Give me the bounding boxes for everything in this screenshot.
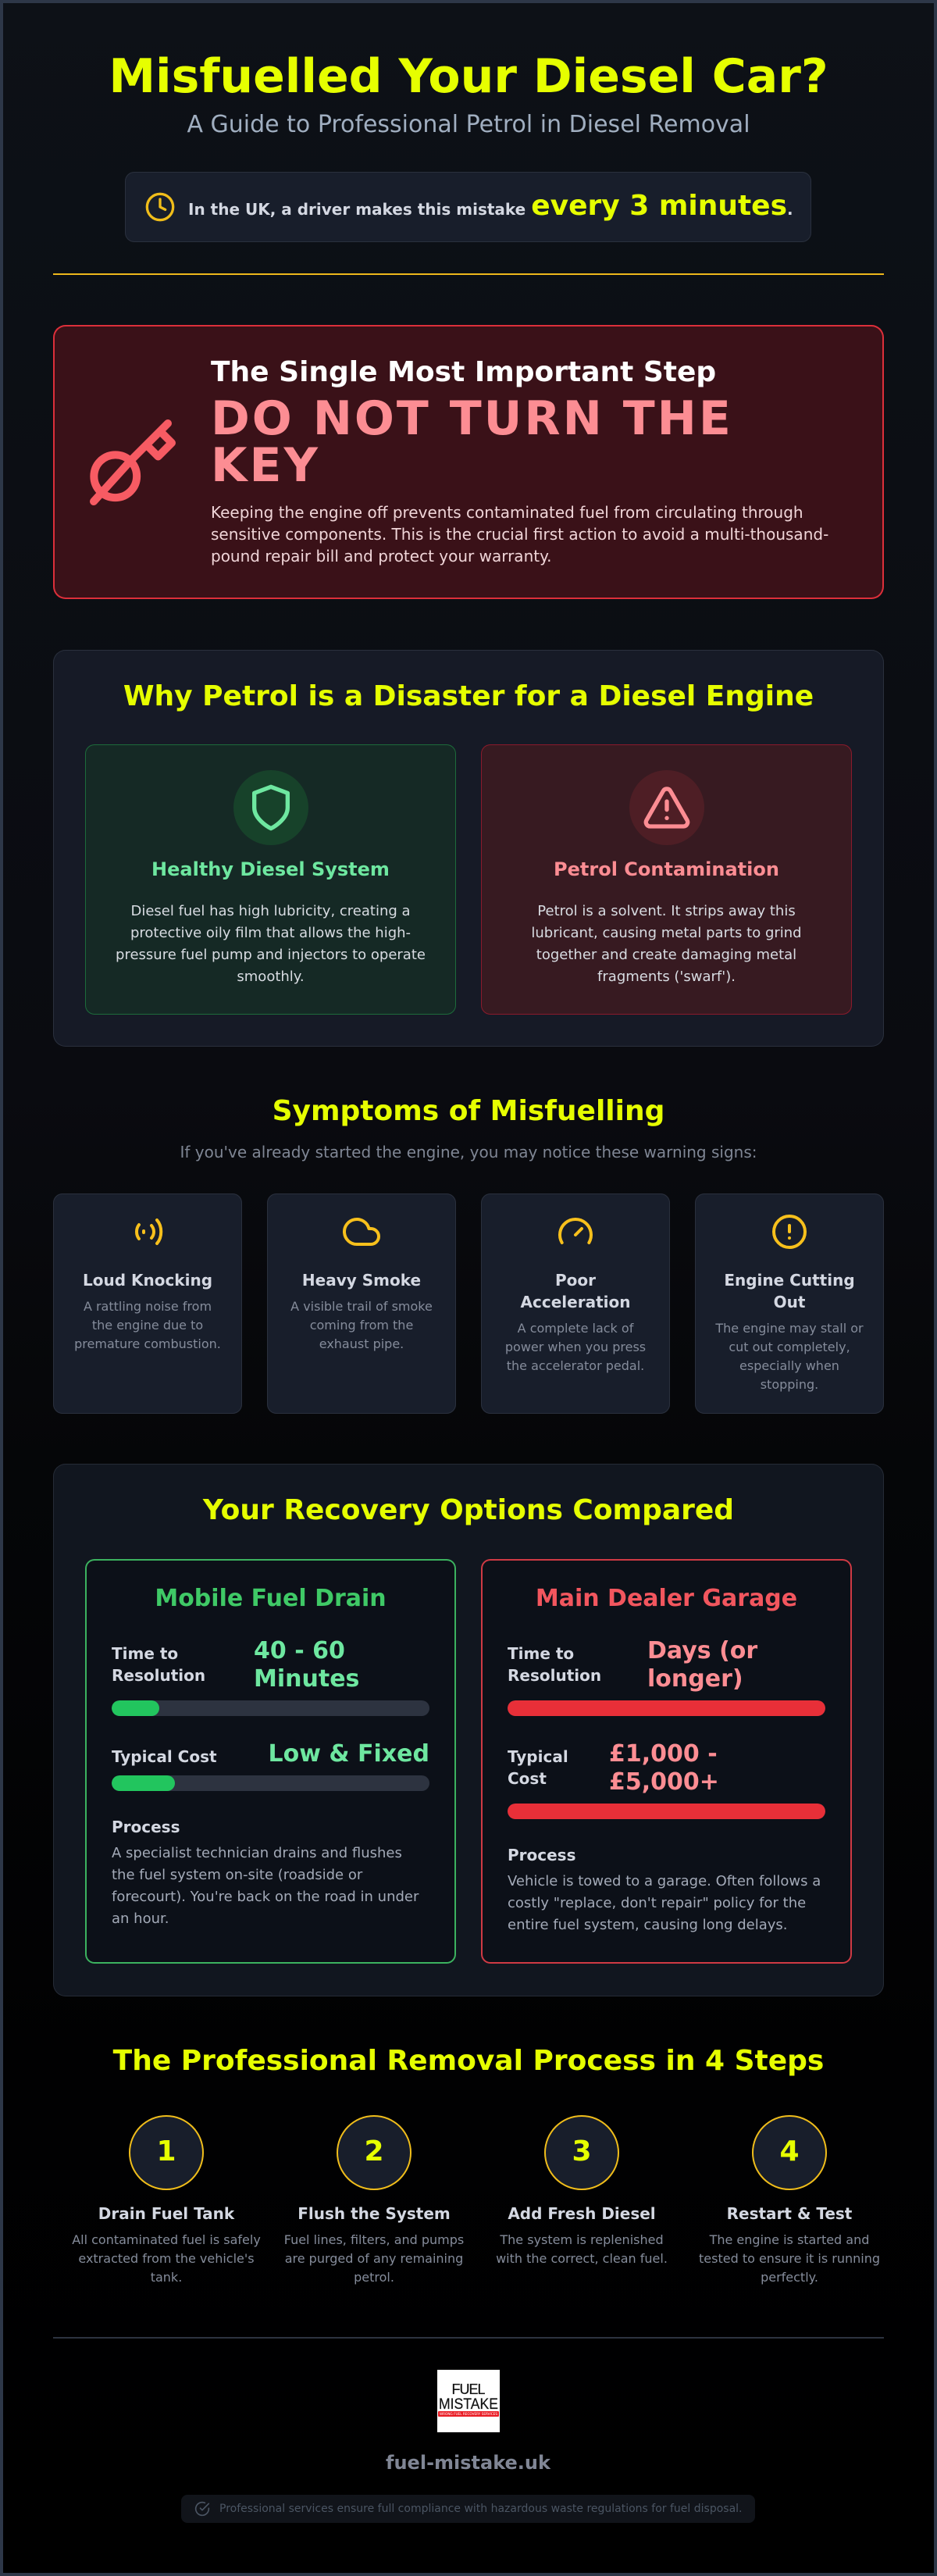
subtitle: A Guide to Professional Petrol in Diesel Removal [187,111,750,138]
alert explanation: sensitive components. This is the crucial first action to avoid a multi-thousand- [211,525,828,544]
title: Misfuelled Your Diesel Car? [109,49,828,104]
panel: why petrol is a disaster [53,650,884,1047]
label: time [112,1644,205,1685]
step 2 [284,2115,464,2285]
icon: check circle [195,2501,209,2517]
card text: together and create damaging metal [536,947,796,963]
label: cost: Typical Cost [112,1747,217,1766]
step number: 1 [156,2135,176,2167]
card text: fragments ('swarf'). [597,969,736,985]
logo: WRONG FUEL RECOVERY SERVICES [440,2412,497,2416]
value: time: longer) [647,1665,743,1693]
icon: gauge [558,1218,593,1245]
process text: Vehicle is towed to a garage. Often follows a [508,1873,821,1889]
label: time: Resolution [112,1666,205,1685]
option title: Main Dealer Garage [536,1585,797,1612]
symptom text: power when you press [505,1340,646,1354]
card text: Petrol is a solvent. It strips away this [537,903,796,919]
label: cost: Cost [508,1769,547,1788]
step text: The engine is started and [710,2232,869,2247]
footer [181,2370,755,2523]
process text [112,1845,419,1927]
symptom text: Out [774,1293,805,1311]
symptom text: Loud Knocking [83,1271,212,1290]
process text: entire fuel system, causing long delays. [508,1917,788,1933]
card title: Petrol Contamination [554,858,779,880]
symptom: loud knocking [53,1193,242,1414]
heading: Why Petrol is a Disaster for a Diesel Engine [123,680,814,712]
note text: Professional services ensure full compliance with hazardous waste regulations for fuel disposal. [219,2503,742,2515]
symptom text: Acceleration [521,1293,630,1311]
card text: pressure fuel pump and injectors to operate [116,947,426,963]
symptom text [715,1271,864,1392]
symptom text: stopping. [761,1377,818,1392]
statistic callout [125,172,811,242]
process text [508,1873,821,1933]
step 3 [496,2115,668,2266]
card text: Diesel fuel has high lubricity, creating a [130,903,411,919]
symptom text: A complete lack of [518,1321,633,1336]
icon: clock [145,192,175,222]
step 4 [699,2115,880,2285]
icon: warning triangle [629,770,704,845]
process text: costly "replace, don't repair" policy for the [508,1895,806,1911]
alert headline [211,391,733,493]
label: time: Resolution [508,1666,601,1685]
label: cost [508,1747,568,1788]
heading: The Professional Removal Process in 4 Steps [113,2045,824,2077]
step text: Fuel lines, filters, and pumps [284,2232,464,2247]
card title: Healthy Diesel System [151,858,390,880]
process text: an hour. [112,1911,169,1927]
value: cost: £5,000+ [609,1768,719,1796]
symptom text [74,1271,221,1351]
value: time [254,1637,359,1693]
icon: key crossed out [90,419,176,505]
option title: Mobile Fuel Drain [155,1585,387,1612]
alert headline: KEY [211,438,320,493]
icon: shield [233,770,308,845]
step number [337,2115,411,2190]
alert eyebrow: The Single Most Important Step [211,356,716,388]
section: removal process [72,2045,880,2285]
symptom text: Poor [555,1271,596,1290]
value: time: Days (or [647,1637,757,1664]
process title: Process [508,1846,576,1864]
symptom text: premature combustion. [74,1336,221,1351]
bar: time [508,1700,825,1716]
alert explanation [211,503,828,566]
value: time: 40 - 60 [254,1637,345,1664]
symptom text: the engine due to [92,1318,203,1333]
value: cost: Low & Fixed [269,1740,429,1768]
step text: The system is replenished [500,2232,664,2247]
step text: All contaminated fuel is safely [72,2232,261,2247]
logo [437,2370,500,2432]
step number: 2 [364,2135,384,2167]
card text: lubricant, causing metal parts to grind [531,925,802,941]
value: time: Minutes [254,1665,359,1693]
label: time: Time to [508,1644,574,1663]
step number [544,2115,619,2190]
symptom: poor acceleration [481,1193,670,1414]
process text: A specialist technician drains and flushes [112,1845,402,1861]
process text: forecourt). You're back on the road in under [112,1889,419,1905]
step number [752,2115,827,2190]
heading: Your Recovery Options Compared [203,1494,734,1526]
step text: tank. [151,2270,182,2285]
label: time: Time to [112,1644,178,1663]
symptom: heavy smoke [267,1193,456,1414]
step text: Flush the System [297,2204,451,2223]
bar: cost [508,1804,825,1819]
step text: perfectly. [761,2270,818,2285]
statistic text: In the UK, a driver makes this mistake every 3 minutes. [188,190,793,222]
value: time [647,1637,757,1693]
header [109,49,828,242]
step text: extracted from the vehicle's [78,2251,255,2266]
symptom text: A visible trail of smoke [290,1299,433,1314]
symptom text: Heavy Smoke [302,1271,421,1290]
symptom text: cut out completely, [729,1340,850,1354]
label: cost: Typical [508,1747,568,1766]
icon: cloud [343,1218,380,1246]
value: cost: £1,000 - [609,1740,718,1768]
logo: FUEL [451,2382,486,2397]
panel: do not turn the key alert [53,325,884,599]
step text [72,2204,261,2285]
step number [129,2115,204,2190]
icon: alert circle [772,1215,807,1249]
value: cost [609,1740,719,1796]
step number: 3 [572,2135,592,2167]
symptom text [505,1271,646,1373]
alert headline: DO NOT TURN THE [211,391,733,446]
card text [116,903,426,985]
card text: smoothly. [237,969,305,985]
symptom text [290,1271,433,1351]
step text [496,2204,668,2266]
step text: petrol. [354,2270,394,2285]
step text: are purged of any remaining [285,2251,463,2266]
symptom text: Engine Cutting [724,1271,855,1290]
label: time [508,1644,601,1685]
intro text: If you've already started the engine, you may notice these warning signs: [180,1143,757,1161]
section: symptoms [53,1095,884,1414]
card: petrol contamination [481,744,852,1015]
step text: Restart & Test [727,2204,852,2223]
symptom: engine cutting out [695,1193,884,1414]
bar: cost [112,1775,429,1791]
process title: Process [112,1818,180,1836]
symptom text: exhaust pipe. [319,1336,404,1351]
step number: 4 [779,2135,800,2167]
card text: protective oily film that allows the high- [130,925,411,941]
bar: time [112,1700,429,1716]
card: healthy diesel system [85,744,456,1015]
process text: the fuel system on-site (roadside or [112,1867,362,1883]
panel: recovery options compared [53,1464,884,1996]
symptom text: The engine may stall or [715,1321,864,1336]
card text [531,903,802,985]
step text: with the correct, clean fuel. [496,2251,668,2266]
alert explanation: pound repair bill and protect your warranty. [211,547,551,566]
website: fuel-mistake.uk [386,2452,550,2474]
alert explanation: Keeping the engine off prevents contaminated fuel from circulating through [211,503,803,522]
icon: vibration [135,1218,162,1245]
symptom text: the accelerator pedal. [507,1358,644,1373]
step 1 [72,2115,261,2285]
step text [699,2204,880,2285]
symptom text: coming from the [310,1318,413,1333]
step text [284,2204,464,2285]
compliance note [181,2495,755,2523]
step text: Add Fresh Diesel [508,2204,656,2223]
symptom text: especially when [739,1358,839,1373]
option: main dealer garage [481,1559,852,1964]
option: mobile fuel drain [85,1559,456,1964]
step text: tested to ensure it is running [699,2251,880,2266]
symptom text: A rattling noise from [84,1299,212,1314]
heading: Symptoms of Misfuelling [273,1095,664,1127]
step text: Drain Fuel Tank [98,2204,234,2223]
